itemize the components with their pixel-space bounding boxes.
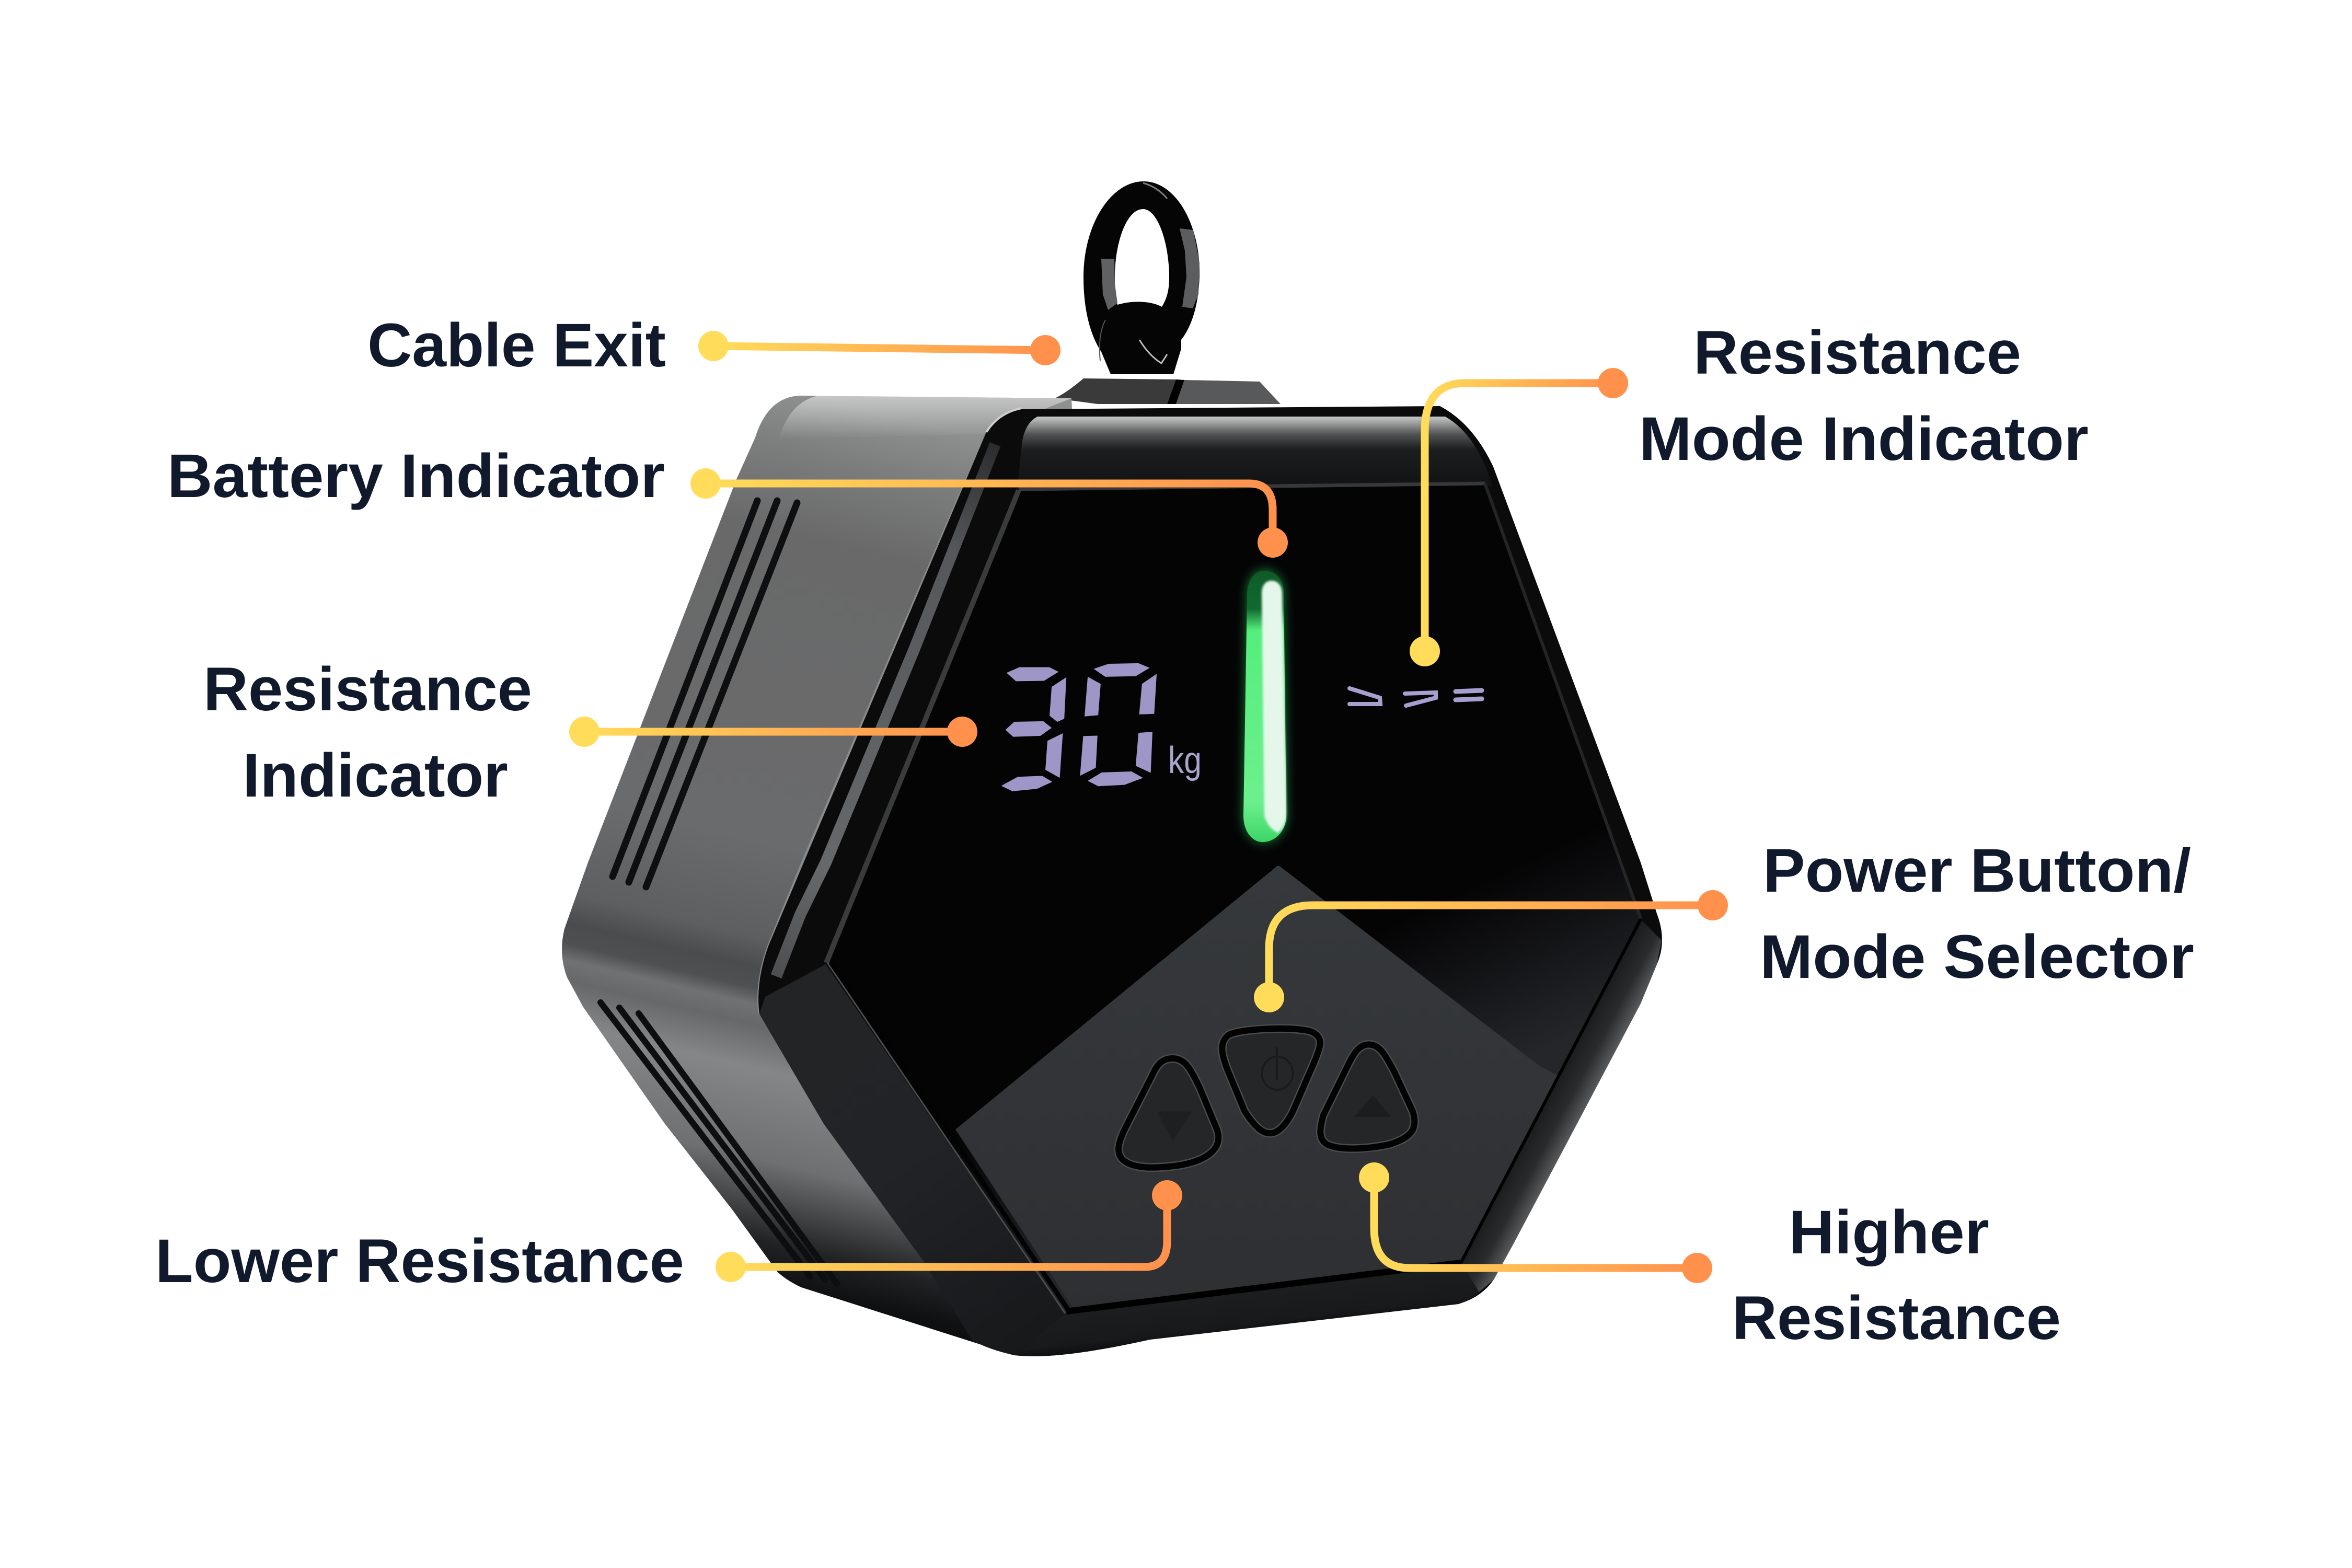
label: higher resistance (1732, 1198, 2061, 1353)
battery indicator bar (1243, 570, 1287, 843)
label: cable exit: Cable Exit (367, 311, 666, 380)
label: higher resistance: Higher (1789, 1198, 1989, 1267)
digit 0 segments (1080, 663, 1157, 786)
digit 3 segments (1001, 667, 1066, 791)
connector: power button (1254, 890, 1728, 1012)
icon: power symbol (1262, 1047, 1293, 1090)
device left side (562, 396, 1098, 1355)
label: battery indicator: Battery Indicator (167, 442, 665, 511)
button: higher resistance (1320, 1044, 1414, 1149)
resistance mode glyphs (1350, 688, 1482, 706)
vents: upper (613, 501, 797, 887)
connector: lower resistance (716, 1180, 1182, 1282)
label: resistance mode indicator: Mode Indicator (1639, 405, 2089, 474)
product: resistance device (562, 181, 1662, 1356)
label: resistance indicator (203, 655, 532, 810)
label: resistance mode indicator (1639, 318, 2089, 474)
panel border lines (827, 919, 1641, 1313)
screen rim lines (826, 483, 1641, 963)
screen (827, 485, 1641, 1313)
label: resistance mode indicator: Resistance (1693, 318, 2021, 387)
highlight: left rim (776, 444, 995, 976)
resistance display: 30 kg (1001, 663, 1202, 791)
front top band (1017, 417, 1492, 494)
right rim (1461, 919, 1662, 1292)
label: resistance indicator: Resistance (203, 655, 532, 724)
unit label: kg (1168, 740, 1202, 781)
button: lower resistance (1119, 1058, 1218, 1168)
vents: lower (601, 1002, 837, 1284)
connector: higher resistance (1359, 1162, 1712, 1283)
carabiner ring (1083, 181, 1200, 374)
device front face (758, 406, 1662, 1356)
button: power (1222, 1029, 1320, 1133)
label: power button / mode selector: Mode Selector (1760, 923, 2194, 991)
control buttons (1119, 1029, 1414, 1168)
ring base (1055, 378, 1281, 404)
label: power button / mode selector: Power Button/ (1763, 836, 2191, 905)
label: power button / mode selector (1760, 836, 2194, 991)
lower control panel (955, 866, 1560, 1308)
label: resistance indicator: Indicator (243, 741, 508, 810)
bevel: bottom (1014, 1263, 1479, 1356)
connector: battery indicator (690, 468, 1288, 558)
connector: cable exit (698, 331, 1060, 365)
connector: resistance mode indicator (1410, 368, 1628, 666)
connector: resistance indicator (569, 717, 977, 747)
label: higher resistance: Resistance (1732, 1284, 2061, 1353)
label: lower resistance: Lower Resistance (155, 1227, 684, 1296)
bevel: lower-left (759, 964, 1065, 1355)
